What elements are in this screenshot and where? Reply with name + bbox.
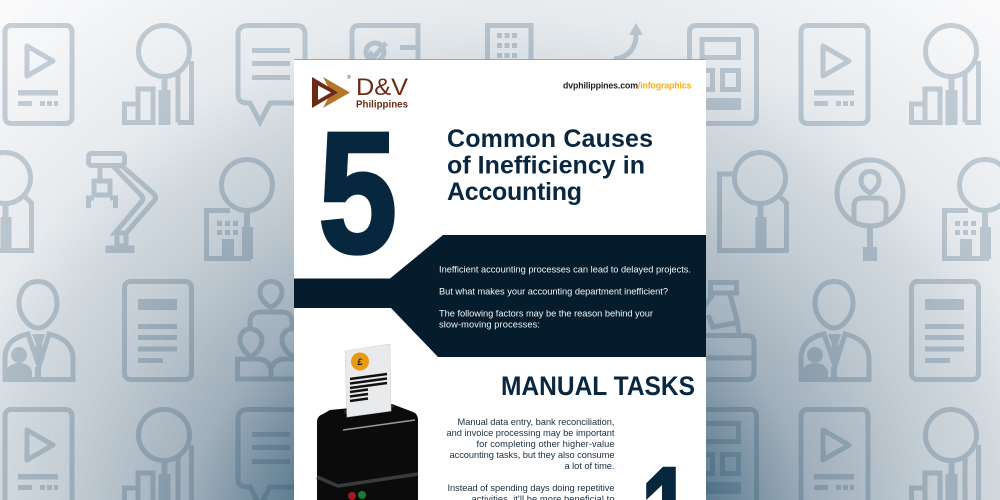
logo xyxy=(312,74,408,110)
title xyxy=(447,125,653,206)
icon: building xyxy=(485,23,534,59)
icon: magnifier chart xyxy=(124,26,192,125)
logo: D&V xyxy=(356,74,408,101)
illustration: invoice in black machine xyxy=(317,344,418,500)
icon: businessman right xyxy=(801,282,869,382)
icon: magnifier document left xyxy=(0,152,32,253)
icon: play document bottom right xyxy=(801,410,868,500)
logo: ® xyxy=(347,74,351,81)
invoice lines xyxy=(350,374,387,401)
intro ribbon: But what makes your accounting department inefficient? xyxy=(439,286,668,296)
icon: calculator bottom xyxy=(706,407,759,500)
panel: infographic page xyxy=(294,59,706,500)
icon: speech bubble bottom xyxy=(236,407,294,500)
logo: Philippines xyxy=(356,98,408,110)
icon: magnifier building right xyxy=(944,160,1000,259)
icon: play document bottom xyxy=(5,410,72,500)
intro ribbon: Inefficient accounting processes can lead to delayed projects. xyxy=(439,264,691,274)
icon: magnifier building xyxy=(206,160,272,259)
section body text: a lot of time. xyxy=(564,461,614,471)
section body text xyxy=(446,417,615,500)
machine body xyxy=(317,404,418,500)
coin xyxy=(351,352,369,370)
icon: text document xyxy=(124,282,192,380)
icon: hand and stack xyxy=(706,280,756,382)
icon: text document right xyxy=(912,282,978,380)
icon: businessman xyxy=(5,282,73,382)
icon: magnifier person xyxy=(837,160,903,261)
red light xyxy=(348,492,356,500)
icon: magnifier chart right xyxy=(912,26,978,125)
icon: robot arm xyxy=(88,154,156,250)
section body text: accounting tasks, but they also consume xyxy=(450,450,614,460)
icon: magnifier chart bottom right xyxy=(912,410,978,500)
intro ribbon: The following factors may be the reason behind your xyxy=(439,308,653,318)
section heading: MANUAL TASKS xyxy=(501,371,695,401)
icon: magnifier chart bottom xyxy=(124,410,192,500)
website url: dvphilippines.com/infographics xyxy=(563,80,692,90)
icon: checklist document xyxy=(350,23,420,59)
section body text: Instead of spending days doing repetitive xyxy=(448,483,614,493)
icon: growth arrow xyxy=(614,23,643,59)
section body text: Manual data entry, bank reconciliation, xyxy=(458,417,614,427)
icon: play document xyxy=(5,26,72,124)
invoice paper xyxy=(345,344,391,417)
title: Accounting xyxy=(447,178,582,206)
section body text: for completing other higher-value xyxy=(476,439,614,449)
icon: group of people xyxy=(235,279,294,382)
intro ribbon: slow-moving processes: xyxy=(439,320,540,330)
icon: magnifier document xyxy=(720,152,786,253)
intro ribbon xyxy=(294,235,706,357)
icon: speech bubble xyxy=(238,26,305,122)
title: of Inefficiency in xyxy=(447,152,645,180)
big number 5: 5 xyxy=(318,98,397,289)
title: Common Causes xyxy=(447,125,653,153)
icon: play document right xyxy=(801,26,868,124)
coin: £ xyxy=(357,357,363,367)
green light xyxy=(358,491,366,499)
section body text: and invoice processing may be important xyxy=(446,428,615,438)
icon: calculator xyxy=(690,26,756,124)
